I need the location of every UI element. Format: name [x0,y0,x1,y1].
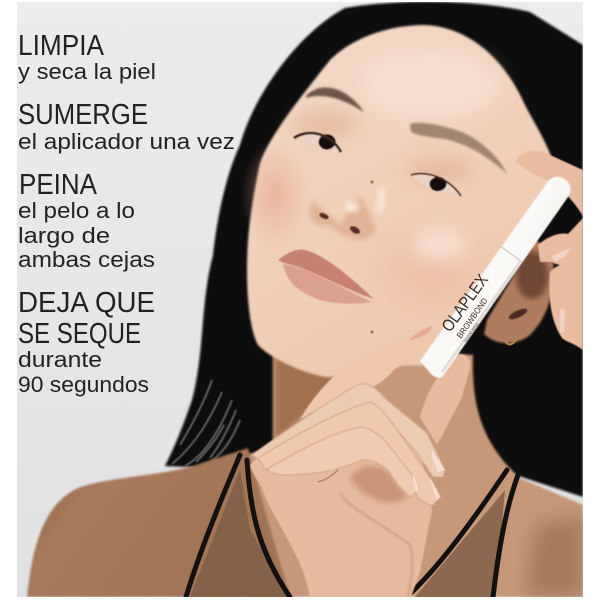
sheer top panels [190,470,505,597]
cheek highlight [412,229,468,261]
finger two [258,402,441,506]
product descriptor: BUILDING SERUM [464,322,479,343]
wrist crease shading [340,493,412,597]
step 3: peina: el pelo a lo [18,198,135,223]
finger one [252,384,445,477]
wispy grey strands on the left [172,380,240,466]
step 4: deja que se seque: 90 segundos [18,372,149,397]
right shoulder shading [525,515,583,597]
ear [484,240,554,344]
product name: BROWBOND [454,296,490,340]
product tube [420,177,571,378]
thumb [420,354,470,445]
nostrils [318,212,361,235]
lower hand with fingers [250,326,470,597]
palm hollow shadow [350,466,408,502]
step 4: deja que se seque: DEJA QUE [18,287,155,319]
left brow [306,88,364,112]
eye socket shading [293,111,474,182]
neck and chest skin [245,340,583,597]
step 2: sumerge [18,99,235,154]
step 1: limpia: y seca la piel [18,59,156,84]
fingernails [413,450,445,500]
step 3: peina: ambas cejas [18,247,155,272]
left shoulder [27,448,290,597]
step 2: sumerge: SUMERGE [18,99,148,131]
step 4: deja que se seque: SE SEQUE [18,318,141,350]
hair [165,2,583,497]
earring [505,335,517,344]
tube shadow side [442,262,520,372]
black straps [186,455,518,597]
nose shadow [309,195,376,240]
step 3: peina [18,169,155,272]
step 1: limpia: LIMPIA [18,30,105,62]
neck shadow under the jaw [270,356,334,439]
cheek blush [243,146,300,234]
step 2: sumerge: el aplicador una vez [18,129,235,154]
beauty marks [370,180,374,334]
left eye [294,133,341,152]
hand holding the tube at the right [516,151,583,350]
step 1: limpia [18,30,156,84]
right eye [411,174,461,196]
cap seam [500,246,522,262]
nose highlight [345,202,359,212]
index fingernail [410,326,432,340]
step 4: deja que se seque [18,287,155,397]
face [241,25,558,377]
right brow [410,123,507,174]
lips [278,249,374,304]
index finger pad under the jaw [300,365,402,420]
wrist and palm [249,438,432,597]
step 3: peina: PEINA [19,169,98,201]
forehead highlight [360,50,500,120]
step 3: peina: largo de [18,223,110,248]
brand name: OLAPLEX [438,271,492,335]
finger three [266,427,419,497]
step 4: deja que se seque: durante [18,347,102,372]
